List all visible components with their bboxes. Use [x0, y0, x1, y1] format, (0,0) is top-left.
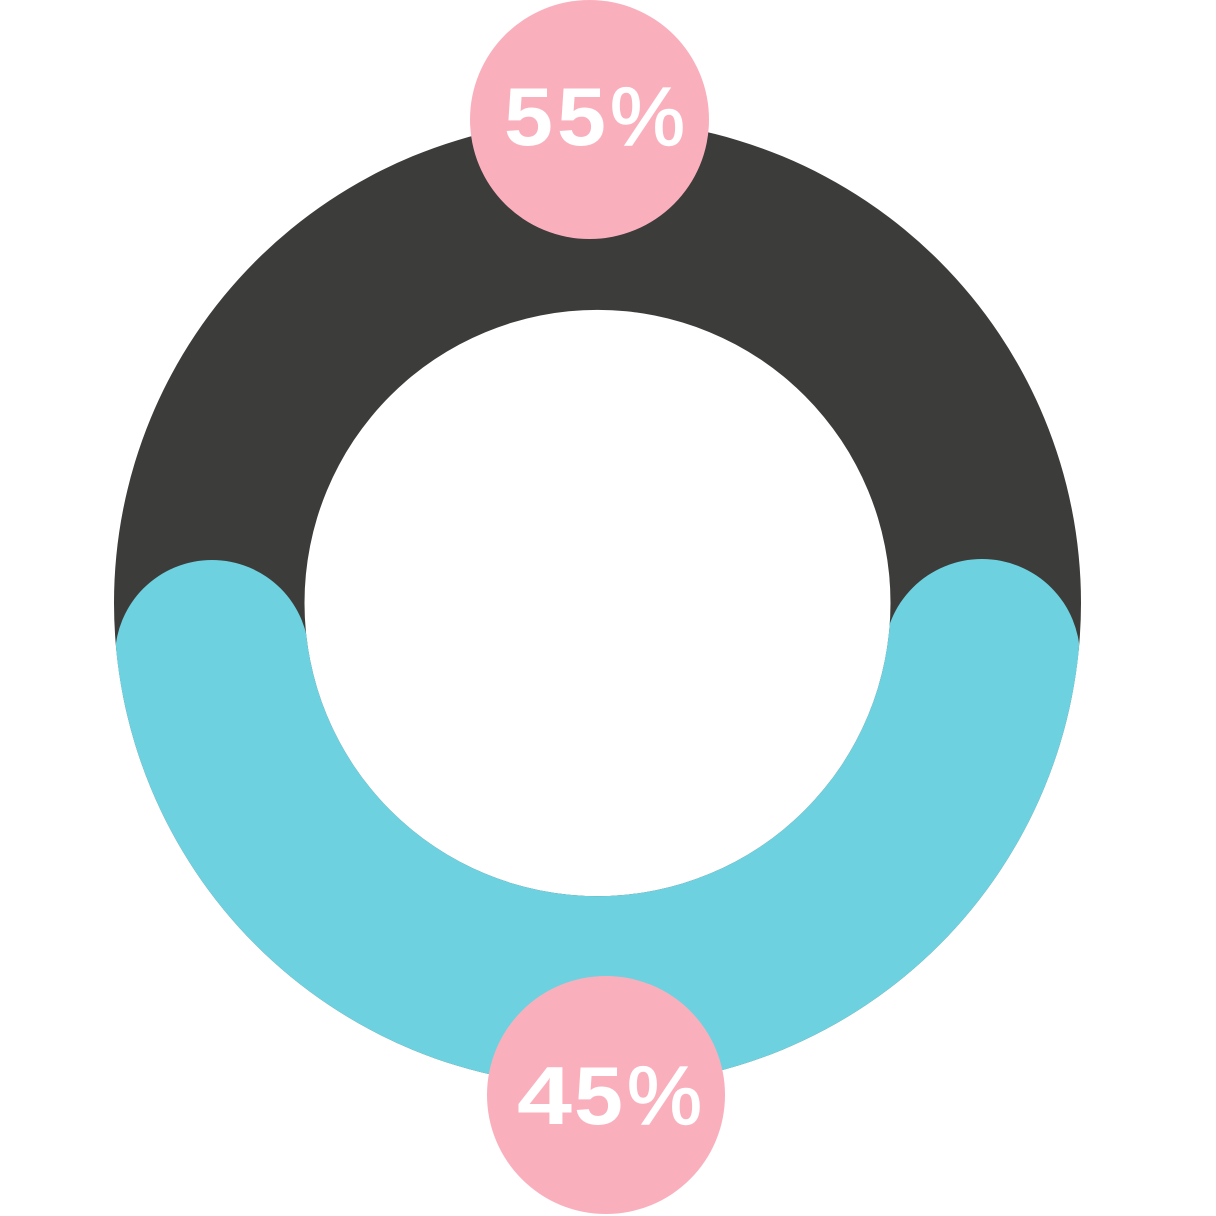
badge: 55%: %	[610, 70, 685, 163]
badge: 55%: 5	[504, 70, 553, 163]
badge: 45%	[487, 976, 725, 1214]
badge: 55%: 5	[557, 70, 606, 163]
donut chart with percentage badges	[114, 0, 1081, 1214]
donut segment: 45% teal with rounded ends	[100, 559, 1100, 1100]
badge: 55%	[470, 0, 709, 239]
badge: 45%: %	[627, 1049, 702, 1142]
donut segment: 55% dark	[114, 119, 1081, 1086]
badge: 45%: 5	[574, 1049, 623, 1142]
badge: 45%: 4	[517, 1049, 572, 1142]
